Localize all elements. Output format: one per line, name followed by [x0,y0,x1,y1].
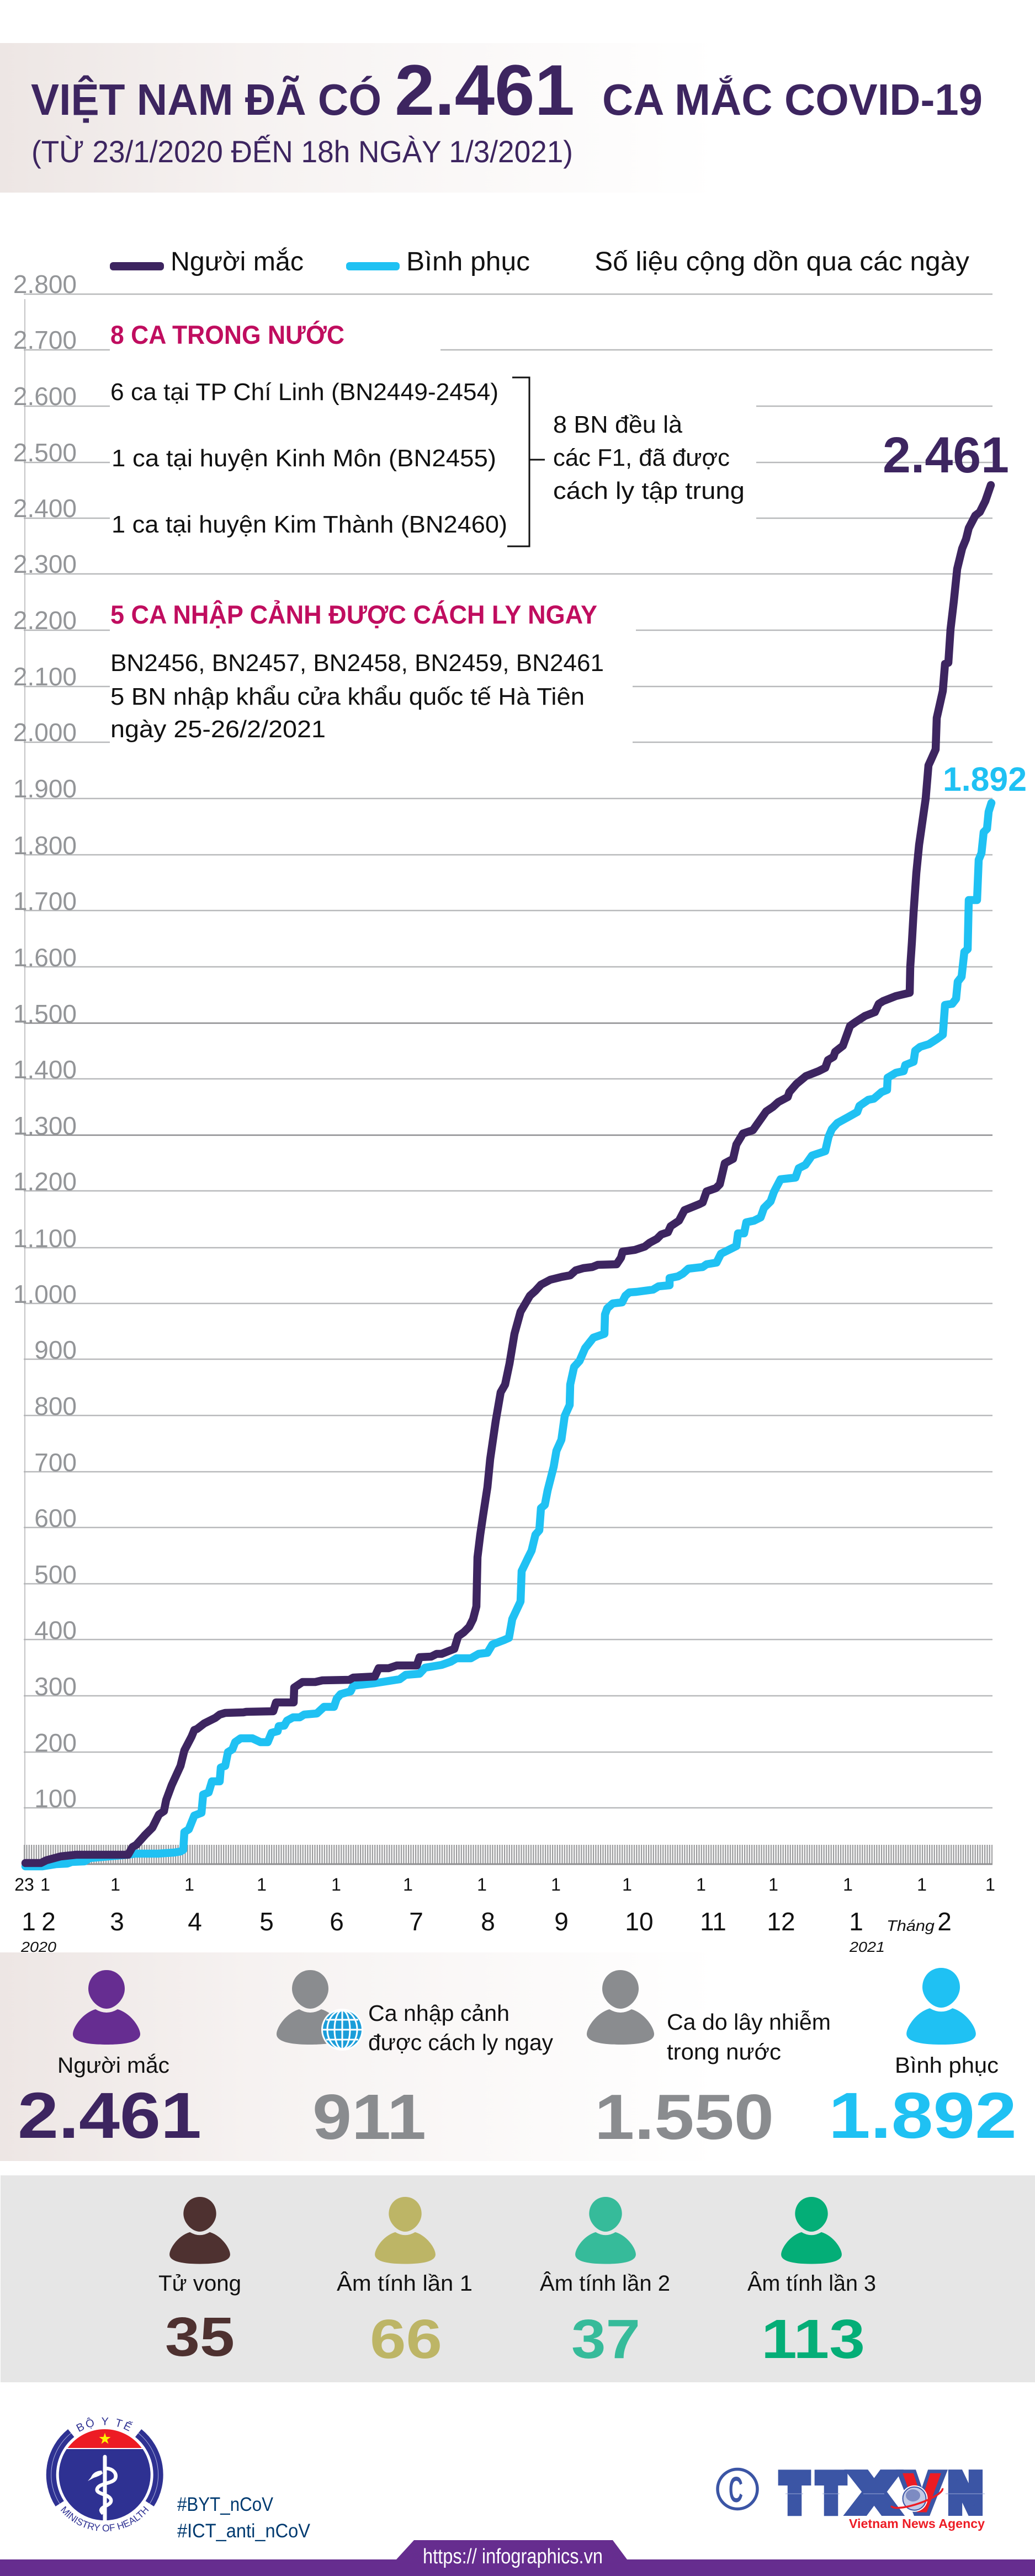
bracket note: cách ly tập trung [553,477,745,504]
y axis labels: 2.800 [13,270,77,299]
stat: imported: Ca nhập cảnh [368,2000,509,2026]
y axis labels: 2.000 [13,718,77,747]
day ticks: 1 [696,1875,706,1894]
month labels: 4 [188,1907,202,1936]
line: recovered [25,803,991,1866]
legend [110,247,969,276]
website url: https:// infographics.vn [423,2545,603,2568]
year 2020: 2020 [20,1939,57,1955]
domestic case list: 6 ca tại TP Chí Linh (BN2449-2454) [110,379,498,406]
title: CA MẮC COVID-19 [602,75,983,124]
agency wordmark: T [818,2463,844,2522]
y axis labels: 2.700 [13,326,77,354]
y axis labels: 2.400 [13,494,77,523]
icon: globe [321,2009,363,2051]
hashtags: #BYT_nCoV [177,2494,274,2515]
grid lines [24,294,992,1808]
day ticks: 1 [622,1875,632,1894]
copyright mark [718,2469,757,2510]
y axis labels: 2.300 [13,550,77,578]
end value: confirmed: 2.461 [883,427,1009,483]
y axis labels: 900 [34,1335,77,1364]
stat: negative once: Âm tính lần 1 [337,2271,473,2296]
y axis labels: 300 [34,1672,77,1701]
stat: domestic: Ca do lây nhiễm [667,2009,831,2035]
y axis labels: 200 [34,1728,77,1757]
y axis labels: 1.600 [13,943,77,972]
day ticks: 1 [768,1875,778,1894]
agency wordmark: V [904,2463,940,2522]
domestic case list [110,379,507,538]
month labels: 1 [22,1907,36,1936]
stat: recovered: Bình phục [895,2053,999,2078]
y axis labels: 1.400 [13,1055,77,1084]
legend: Bình phục [406,247,530,276]
end value: recovered: 1.892 [943,760,1027,798]
note: domestic cases [110,320,745,546]
stat: deaths: 35 [165,2306,235,2368]
footer bar [0,2540,1035,2576]
domestic case list: 1 ca tại huyện Kim Thành (BN2460) [112,511,507,538]
bracket note [553,411,745,504]
day ticks: 1 [40,1875,50,1894]
y axis labels: 800 [34,1392,77,1420]
y axis labels: 1.100 [13,1224,77,1253]
stat: negative three times [747,2197,876,2370]
day ticks: 23 [14,1875,34,1894]
line: confirmed cases [25,485,991,1863]
month labels: 5 [259,1907,274,1936]
day ticks: 1 [403,1875,413,1894]
agency wordmark: V [903,2463,941,2522]
copyright mark: C [729,2469,743,2510]
logo: Ministry of Health: MINISTRY OF HEALTH [61,2506,149,2532]
month labels: 6 [330,1907,344,1936]
legend: Số liệu cộng dồn qua các ngày [595,247,969,276]
month labels: 12 [767,1907,795,1936]
title: 2.461 [395,50,575,130]
day ticks: 1 [843,1875,853,1894]
header band [0,43,983,193]
hashtags: #ICT_anti_nCoV [177,2520,311,2542]
y axis labels: 2.500 [13,438,77,467]
month labels: 2 [937,1907,952,1936]
month labels: 11 [700,1907,726,1936]
imported case details [110,650,604,743]
stat: recovered: 1.892 [829,2079,1017,2152]
stat: negative once [337,2197,473,2370]
y axis labels: 1.800 [13,831,77,860]
bracket note: 8 BN đều là [553,411,683,438]
agency wordmark: T [782,2463,808,2522]
agency wordmark: N [949,2463,981,2522]
stat: confirmed [18,1970,201,2152]
title [31,50,983,130]
stat: negative three times: 113 [761,2308,865,2370]
stat: negative twice: 37 [571,2308,640,2370]
y axis labels: 1.700 [13,887,77,916]
y axis labels: 1.500 [13,999,77,1028]
y axis labels: 100 [34,1784,77,1813]
stat: domestic: 1.550 [595,2081,774,2153]
imported case details: ngày 25-26/2/2021 [110,716,326,743]
title: VIỆT NAM ĐÃ CÓ [31,75,381,124]
day ticks: 1 [477,1875,487,1894]
month labels: 10 [625,1907,654,1936]
logo: Ministry of Health: BỘ Y TẾ [76,2417,134,2432]
y axis labels: 1.000 [13,1280,77,1308]
stat: negative three times: Âm tính lần 3 [747,2271,876,2296]
month labels: 1 [849,1907,863,1936]
y axis labels: 500 [34,1560,77,1589]
month labels: 7 [409,1907,423,1936]
stat: negative twice [540,2197,670,2370]
legend: Người mắc [171,247,304,276]
logo: Ministry of Health [46,2417,163,2532]
hashtags [177,2494,311,2542]
y axis labels: 1.900 [13,774,77,803]
stat: imported [277,1970,553,2153]
day ticks: 1 [331,1875,341,1894]
panel: secondary totals [1,2175,1035,2382]
stat: confirmed: Người mắc [57,2053,169,2078]
day ticks: 1 [257,1875,267,1894]
agency wordmark: X [853,2463,895,2522]
stat: imported: được cách ly ngay [368,2030,553,2055]
y axis labels: 2.200 [13,606,77,635]
domestic case list: 1 ca tại huyện Kinh Môn (BN2455) [112,445,496,472]
logo: TTXVN [718,2463,985,2531]
note: imported cases [110,600,604,743]
vertical axis [24,299,25,1864]
imported case details: 5 BN nhập khẩu cửa khẩu quốc tế Hà Tiên [110,683,585,710]
month word: Tháng [887,1917,935,1934]
x axis labels [14,1875,995,1955]
day ticks: 1 [985,1875,995,1894]
stat: domestic: trong nước [667,2039,781,2064]
year 2021: 2021 [849,1939,885,1955]
y axis labels: 2.600 [13,382,77,411]
stat: recovered [829,1968,1017,2152]
day ticks: 1 [110,1875,120,1894]
stat: deaths: Tử vong [158,2271,241,2296]
heading: 5 imported cases: 5 CA NHẬP CẢNH ĐƯỢC CÁCH LY NGAY [110,600,597,629]
panel: main totals [0,1952,1017,2161]
date tick band [24,1845,992,1864]
bracket [507,377,545,546]
y axis labels: 600 [34,1504,77,1532]
imported case details: BN2456, BN2457, BN2458, BN2459, BN2461 [110,650,604,677]
month labels: 9 [554,1907,569,1936]
stat: domestic [587,1970,831,2153]
day ticks [14,1875,995,1894]
subtitle: (TỪ 23/1/2020 ĐẾN 18h NGÀY 1/3/2021) [31,134,573,169]
line chart [13,270,1027,1866]
y axis labels: 700 [34,1448,77,1477]
month labels: 2 [41,1907,56,1936]
y axis labels: 1.200 [13,1167,77,1196]
stat: deaths [158,2197,241,2368]
agency tagline: Vietnam News Agency [849,2516,985,2531]
agency wordmark [782,2463,981,2522]
month labels [22,1907,952,1936]
day ticks: 1 [551,1875,561,1894]
day ticks: 1 [917,1875,927,1894]
stat: negative twice: Âm tính lần 2 [540,2271,670,2296]
stat: confirmed: 2.461 [18,2079,201,2152]
month labels: 8 [481,1907,495,1936]
y axis labels: 400 [34,1616,77,1644]
bracket note: các F1, đã được [553,444,730,471]
y axis labels: 2.100 [13,662,77,691]
globe ring [891,2485,944,2512]
stat: imported: 911 [312,2081,426,2153]
stat: negative once: 66 [370,2308,442,2370]
heading: 8 domestic cases: 8 CA TRONG NƯỚC [110,320,344,349]
y axis labels [13,270,77,1813]
y axis labels: 1.300 [13,1111,77,1140]
month labels: 3 [110,1907,124,1936]
day ticks: 1 [184,1875,194,1894]
